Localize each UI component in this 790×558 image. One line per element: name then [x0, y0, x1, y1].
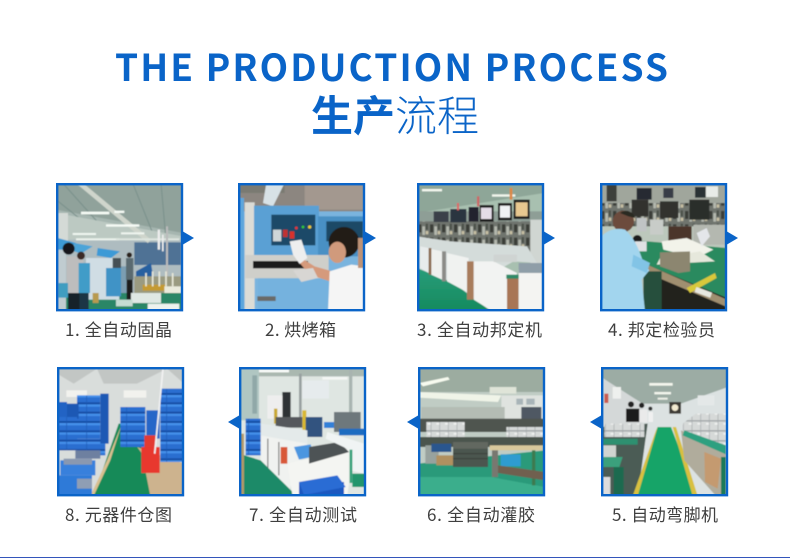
frame — [418, 184, 543, 310]
frame — [239, 184, 364, 310]
photo: curing oven — [240, 185, 363, 309]
label: 3. 全自动邦定机 — [417, 316, 542, 341]
panel: step 1 — [56, 183, 194, 341]
label: 1. 全自动固晶 — [65, 316, 172, 341]
photo: bonding inspector — [602, 185, 725, 309]
photo: wire bonders — [419, 185, 542, 309]
label: 5. 自动弯脚机 — [612, 501, 718, 526]
label: 6. 全自动灌胶 — [427, 501, 535, 526]
panel: step 7 — [228, 367, 366, 526]
frame — [57, 184, 182, 310]
panel: step 4 — [600, 183, 738, 341]
photo: auto testing line — [241, 369, 364, 494]
arrow — [183, 232, 194, 244]
photo: auto potting — [420, 369, 543, 494]
photo: die bonding hall — [58, 185, 181, 309]
bottom rule — [0, 557, 790, 558]
title: chinese: 生产流程 — [311, 83, 479, 144]
panel: step 6 — [407, 367, 545, 526]
arrow — [228, 416, 239, 428]
frame — [601, 184, 726, 310]
label: 4. 邦定检验员 — [608, 316, 715, 341]
label: 7. 全自动测试 — [249, 501, 357, 526]
arrow — [544, 232, 555, 244]
arrow — [590, 416, 601, 428]
frame — [58, 368, 183, 495]
frame — [602, 368, 727, 495]
label: 8. 元器件仓图 — [65, 501, 172, 526]
photo: component warehouse — [59, 369, 182, 494]
arrow — [727, 232, 738, 244]
arrow — [407, 416, 418, 428]
frame — [419, 368, 544, 495]
frame — [240, 368, 365, 495]
arrow — [365, 232, 376, 244]
panel: step 5 — [590, 367, 728, 526]
label: 2. 烘烤箱 — [265, 316, 336, 341]
photo: auto pin bending — [603, 369, 726, 494]
panel: step 3 — [417, 183, 555, 341]
panel: step 8 — [57, 367, 184, 526]
title: english: THE PRODUCTION PROCESS — [115, 38, 668, 92]
panel: step 2 — [238, 183, 376, 341]
